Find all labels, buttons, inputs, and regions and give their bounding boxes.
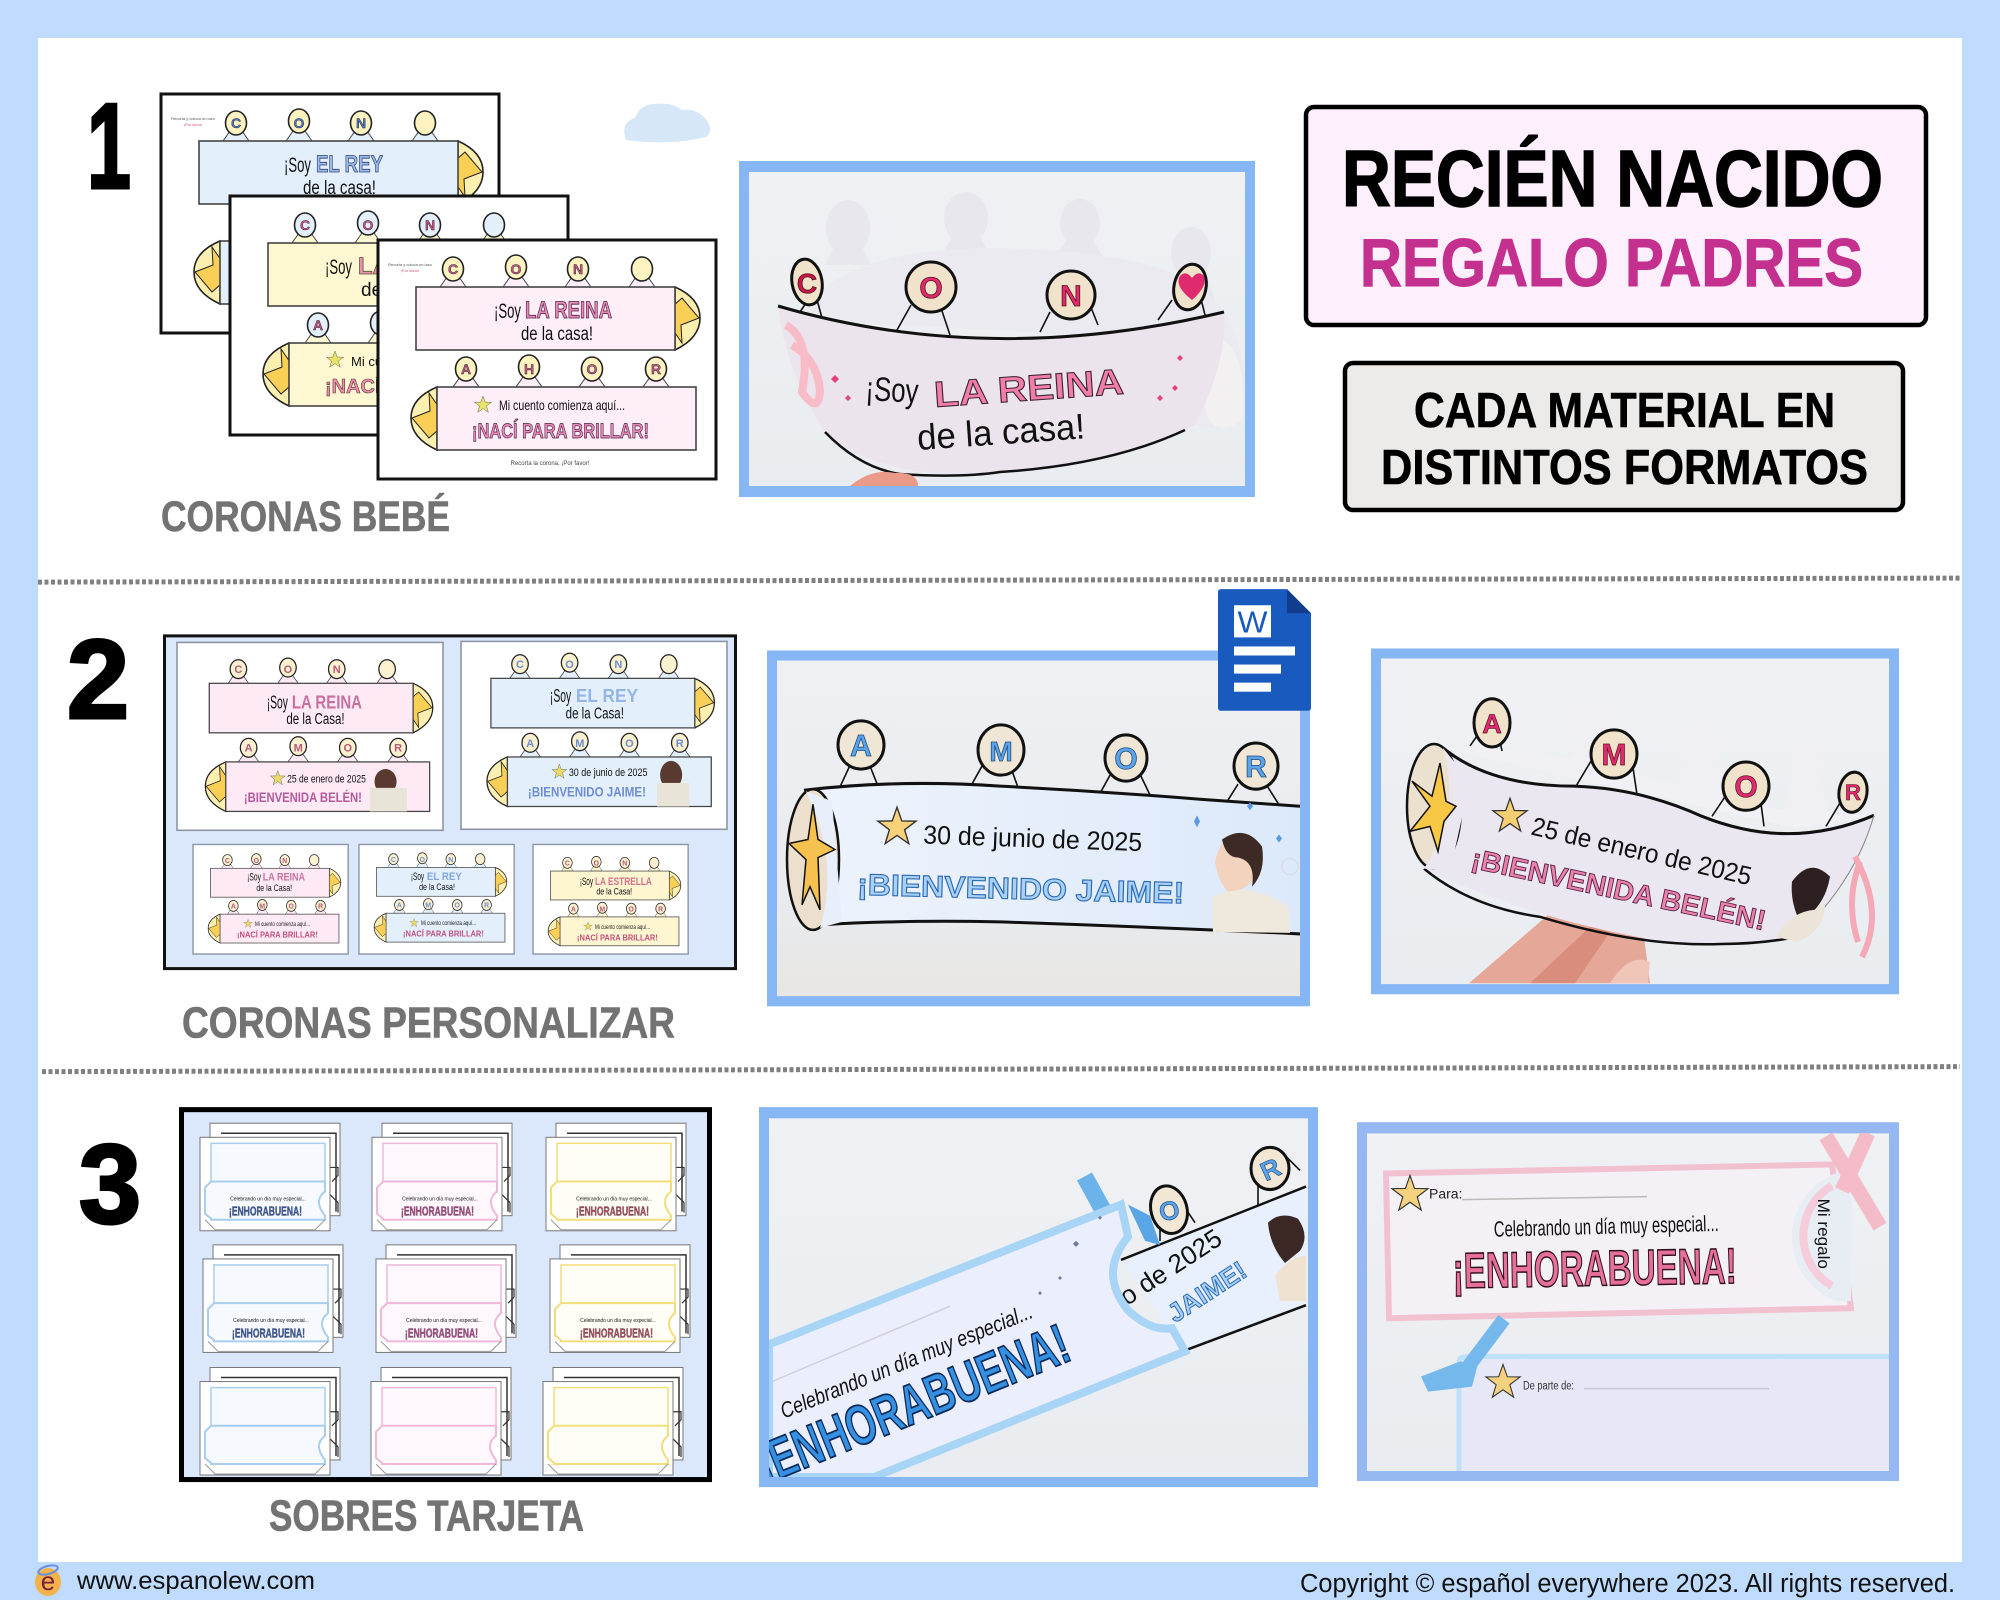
envelope: pink 2: Celebrando un día muy especial... <box>406 1318 482 1324</box>
sheet: el rey (blue): EL REY <box>316 151 383 178</box>
sheet: small rey: CON <box>391 857 453 864</box>
envelope: blue 3 <box>200 1367 340 1475</box>
caption: sobres tarjeta: SOBRES TARJETA <box>269 1492 584 1540</box>
panel: coronas personalizar sheets <box>164 636 736 969</box>
photo: enhorabuena pink envelope: Celebrando un día muy especial... <box>1493 1211 1719 1242</box>
sheet: el rey (blue): de la casa! <box>303 178 376 199</box>
photo: enhorabuena pink envelope: De parte de: <box>1523 1379 1574 1393</box>
sheet: la reina (pink): CON <box>448 261 583 277</box>
sheet: rey jaime: AMOR <box>526 738 684 750</box>
sheet: small estrella: Mi cuento comienza aquí... <box>595 924 650 931</box>
copyright: Copyright © español everywhere 2023. All rights reserved. <box>1300 1570 1955 1598</box>
sheet: el rey (blue): CON <box>231 115 366 131</box>
envelope: yellow 3 <box>543 1367 683 1475</box>
photo: crown bienvenido jaime: A <box>850 730 872 763</box>
sheet: la reina (pink): de la casa! <box>521 324 593 345</box>
photo: enhorabuena pink envelope: Mi regalo <box>1814 1199 1833 1269</box>
logo <box>35 1564 61 1596</box>
subtitle: regalo padres: REGALO PADRES <box>1360 225 1863 301</box>
envelope: yellow 1 <box>546 1123 686 1231</box>
icon: word document <box>1218 589 1311 711</box>
envelope: pink 1: Celebrando un día muy especial... <box>402 1197 478 1203</box>
photo: crown bienvenida belén <box>1371 648 1899 994</box>
sheet: la reina (yellow): ¡NACÍ <box>325 375 381 398</box>
envelope: pink 2: ¡ENHORABUENA! <box>405 1325 478 1340</box>
sheet: small rey: EL REY <box>427 871 462 883</box>
photo: enhorabuena pink envelope: Para: <box>1429 1186 1462 1202</box>
envelope: yellow 2: ¡ENHORABUENA! <box>580 1325 653 1340</box>
sheet: small estrella: de la Casa! <box>596 886 632 896</box>
envelope: pink 1: ¡ENHORABUENA! <box>401 1204 474 1219</box>
sheet: la reina (yellow) <box>230 196 568 435</box>
photo: enhorabuena blue envelope <box>747 1107 1318 1495</box>
sheet: la reina (pink): ¡NACÍ PARA BRILLAR! <box>472 420 649 443</box>
sheet: la reina (pink): ¡Por favor! <box>401 268 419 273</box>
caption: coronas bebé: CORONAS BEBÉ <box>161 493 450 541</box>
sheet: small estrella: ¡Soy <box>580 876 593 888</box>
title box <box>1306 107 1926 325</box>
envelope: blue 2: ¡ENHORABUENA! <box>232 1325 305 1340</box>
photo: crown bienvenido jaime: ¡BIENVENIDO JAIME! <box>857 869 1185 910</box>
title: recién nacido: RECIÉN NACIDO <box>1342 134 1883 223</box>
section 3 <box>79 1107 1899 1540</box>
text: cada material en: CADA MATERIAL EN <box>1414 384 1835 438</box>
sheet: small reina: LA REINA <box>263 872 305 884</box>
photo: crown bienvenida belén: M <box>1602 739 1626 772</box>
photo: enhorabuena blue envelope: JAIME! <box>1162 1255 1252 1328</box>
photo: enhorabuena blue envelope: R <box>1256 1152 1285 1187</box>
sheet: reina belén: AMOR <box>245 743 402 755</box>
section 2 <box>38 578 1962 1072</box>
photo: crown la reina: C <box>797 268 817 299</box>
photo: crown la reina <box>739 161 1255 497</box>
photo: crown bienvenido jaime <box>767 650 1310 1006</box>
sheet: la reina (pink) <box>378 240 716 479</box>
sheet: rey jaime: de la Casa! <box>566 705 624 722</box>
photo: crown la reina: LA REINA <box>933 361 1125 415</box>
sheet: rey jaime: CON <box>516 659 622 671</box>
sheet: la reina (pink): Recorta la corona, ¡Por favor! <box>511 461 590 467</box>
photo: enhorabuena pink envelope <box>1357 1122 1899 1481</box>
photo: enhorabuena pink envelope: ¡ENHORABUENA! <box>1452 1238 1737 1299</box>
sheet: la reina (yellow): CON <box>300 217 435 233</box>
sheet: small estrella: AMOR <box>571 906 663 913</box>
sheet: la reina (yellow): de <box>361 280 382 301</box>
sheet: la reina (yellow): A <box>313 317 323 333</box>
photo: crown la reina: de la casa! <box>916 405 1086 458</box>
sheet: rey jaime: ¡Soy <box>550 685 571 706</box>
sheet: small rey: ¡Soy <box>411 871 424 883</box>
sheet: reina belén: ¡Soy <box>267 691 288 712</box>
sheet: el rey (blue) <box>161 94 499 333</box>
photo: crown bienvenida belén: 25 de enero de 2025 <box>1529 811 1755 891</box>
envelope: blue 2: Celebrando un día muy especial... <box>233 1318 309 1324</box>
sheet: el rey (blue): Recorta y coloca un lazo <box>171 116 216 121</box>
sheet: small rey <box>359 844 514 954</box>
section number 2: 2 <box>67 616 129 742</box>
envelope: pink 1 <box>372 1123 512 1231</box>
sheet: reina belén: CON <box>234 664 341 676</box>
sheet: el rey (blue): ¡Por favor! <box>184 122 202 127</box>
sheet: small reina: AMOR <box>231 904 323 911</box>
sheet: la reina (yellow): LA <box>358 253 390 280</box>
photo: enhorabuena blue envelope: Celebrando un día muy especial... <box>777 1298 1036 1423</box>
sheet: small reina: de la Casa! <box>256 883 292 893</box>
photo: crown la reina: O <box>919 272 943 305</box>
sheet: reina belén: 25 de enero de 2025 <box>287 773 366 785</box>
sheet: small reina: ¡Soy <box>247 872 261 884</box>
sheet: small reina: ¡NACÍ PARA BRILLAR! <box>237 930 318 940</box>
sheet: reina belén <box>177 642 443 830</box>
sheet: small rey: ¡NACÍ PARA BRILLAR! <box>403 929 484 939</box>
photo: enhorabuena blue envelope: O <box>1156 1194 1183 1228</box>
photo: crown la reina: N <box>1060 280 1082 313</box>
sheet: la reina (pink): LA REINA <box>525 297 612 324</box>
section number 1: 1 <box>87 78 131 214</box>
photo: crown bienvenida belén: R <box>1845 780 1861 805</box>
envelope: blue 1 <box>200 1123 340 1231</box>
sheet: el rey (blue): ¡Soy <box>284 154 311 177</box>
envelope: pink 3 <box>371 1367 511 1475</box>
photo: crown bienvenido jaime: R <box>1245 751 1267 784</box>
sheet: rey jaime: ¡BIENVENIDO JAIME! <box>528 784 646 799</box>
sheet: small reina <box>193 844 348 954</box>
sheet: rey jaime <box>461 641 727 829</box>
caption: coronas personalizar: CORONAS PERSONALIZAR <box>182 999 675 1047</box>
envelope: blue 2 <box>203 1245 343 1352</box>
photo: crown bienvenido jaime: O <box>1114 743 1138 776</box>
panel: sobres tarjeta sheets <box>182 1110 710 1480</box>
sheet: small estrella: LA ESTRELLA <box>595 876 652 888</box>
formats box <box>1345 363 1903 510</box>
photo: crown bienvenida belén: A <box>1482 708 1502 739</box>
sheet: small rey: de la Casa! <box>419 882 455 892</box>
text: distintos formatos: DISTINTOS FORMATOS <box>1381 441 1868 495</box>
photo: crown bienvenida belén: ¡BIENVENIDA BELÉN! <box>1469 843 1769 936</box>
envelope: blue 1: ¡ENHORABUENA! <box>229 1204 302 1219</box>
icon: cloud <box>624 104 710 142</box>
sheet: small reina: CON <box>225 858 287 865</box>
sheet: la reina (pink): ¡Soy <box>494 300 521 323</box>
sheet: la reina (pink): Recorta y coloca un lazo <box>388 262 433 267</box>
footer <box>35 1564 1955 1598</box>
photo: crown bienvenida belén: O <box>1734 771 1758 804</box>
sheet: la reina (pink): AHOR <box>461 361 661 377</box>
photo: crown bienvenido jaime: M <box>989 736 1013 767</box>
photo: crown bienvenido jaime: 30 de junio de 2025 <box>923 819 1143 857</box>
section number 3: 3 <box>79 1120 141 1247</box>
sheet: reina belén: LA REINA <box>292 691 362 712</box>
envelope: yellow 1: ¡ENHORABUENA! <box>576 1204 649 1219</box>
sheet: rey jaime: EL REY <box>576 685 638 706</box>
sheet: rey jaime: 30 de junio de 2025 <box>569 767 648 779</box>
envelope: yellow 1: Celebrando un día muy especial... <box>576 1197 652 1203</box>
crown sheets: coronas bebé <box>161 94 716 479</box>
sheet: small rey: Mi cuento comienza aquí... <box>421 920 476 927</box>
sheet: reina belén: de la Casa! <box>286 711 345 728</box>
icon: word document: W <box>1237 606 1268 639</box>
sheet: small reina: Mi cuento comienza aquí... <box>255 921 310 928</box>
logo: e <box>41 1566 55 1596</box>
envelope: blue 1: Celebrando un día muy especial... <box>230 1197 306 1203</box>
photo: enhorabuena blue envelope: o de 2025 <box>1114 1223 1227 1311</box>
photo: crown la reina: ¡Soy <box>865 370 919 411</box>
envelope: yellow 2 <box>550 1245 690 1352</box>
sheet: la reina (yellow): ¡Soy <box>325 256 352 279</box>
sheet: reina belén: ¡BIENVENIDA BELÉN! <box>244 790 362 805</box>
sheet: small estrella <box>533 844 688 954</box>
photo: enhorabuena blue envelope: ¡ENHORABUENA! <box>747 1312 1078 1495</box>
sheet: la reina (yellow): Mi cu <box>351 354 382 369</box>
sheet: small estrella: CON <box>565 861 627 868</box>
sheet: small estrella: ¡NACÍ PARA BRILLAR! <box>577 932 658 942</box>
sheet: small rey: AMOR <box>397 903 489 910</box>
sheet: la reina (pink): Mi cuento comienza aquí... <box>499 397 625 413</box>
envelope: yellow 2: Celebrando un día muy especial... <box>580 1318 656 1324</box>
envelope: pink 2 <box>376 1245 516 1352</box>
website: www.espanolew.com <box>76 1567 315 1595</box>
